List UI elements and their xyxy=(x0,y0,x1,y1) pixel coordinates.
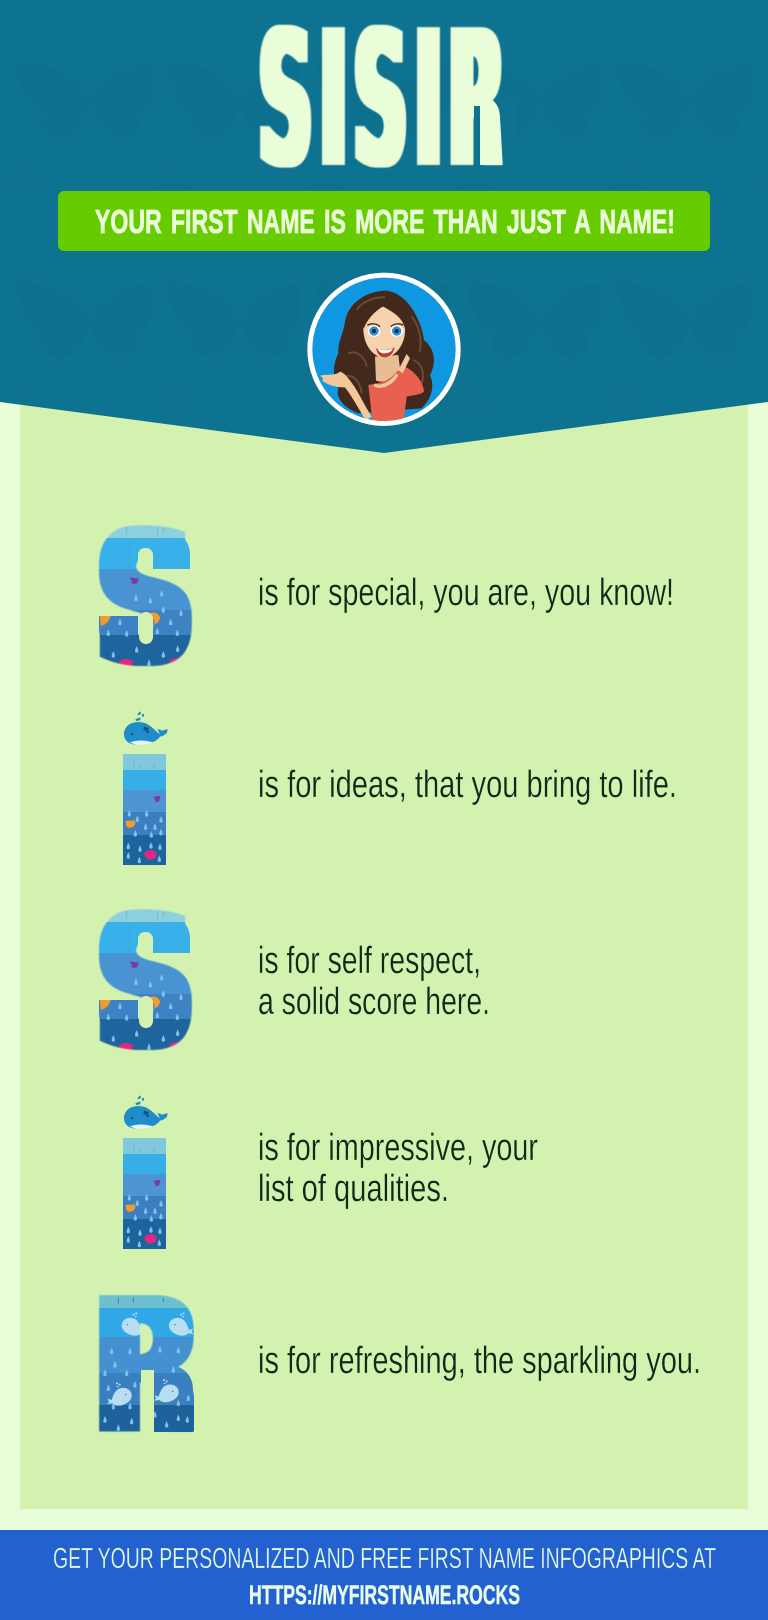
text: second I lines xyxy=(258,1127,538,1210)
text: second I lines: is for impressive, your xyxy=(258,1127,538,1169)
subtitle banner xyxy=(58,191,710,251)
title R leg adjustment xyxy=(474,98,516,170)
text: second S lines xyxy=(258,940,490,1023)
letter S (first) xyxy=(90,520,200,670)
footer line 2: HTTPS://MYFIRSTNAME.ROCKS xyxy=(249,1580,520,1610)
avatar: cartoon woman in circle xyxy=(307,273,461,426)
letter S (second) xyxy=(90,904,200,1054)
text: second S lines: a solid score here. xyxy=(258,981,490,1023)
letter I (second) with whale xyxy=(123,1095,168,1249)
panel: letters background xyxy=(20,380,748,1509)
text: second I lines: list of qualities. xyxy=(258,1168,449,1210)
header banner with chevron xyxy=(0,0,768,453)
letter R xyxy=(98,1294,194,1432)
text: second S lines: is for self respect, xyxy=(258,940,481,982)
letter I (first) with whale xyxy=(123,711,168,865)
footer xyxy=(0,1530,768,1620)
